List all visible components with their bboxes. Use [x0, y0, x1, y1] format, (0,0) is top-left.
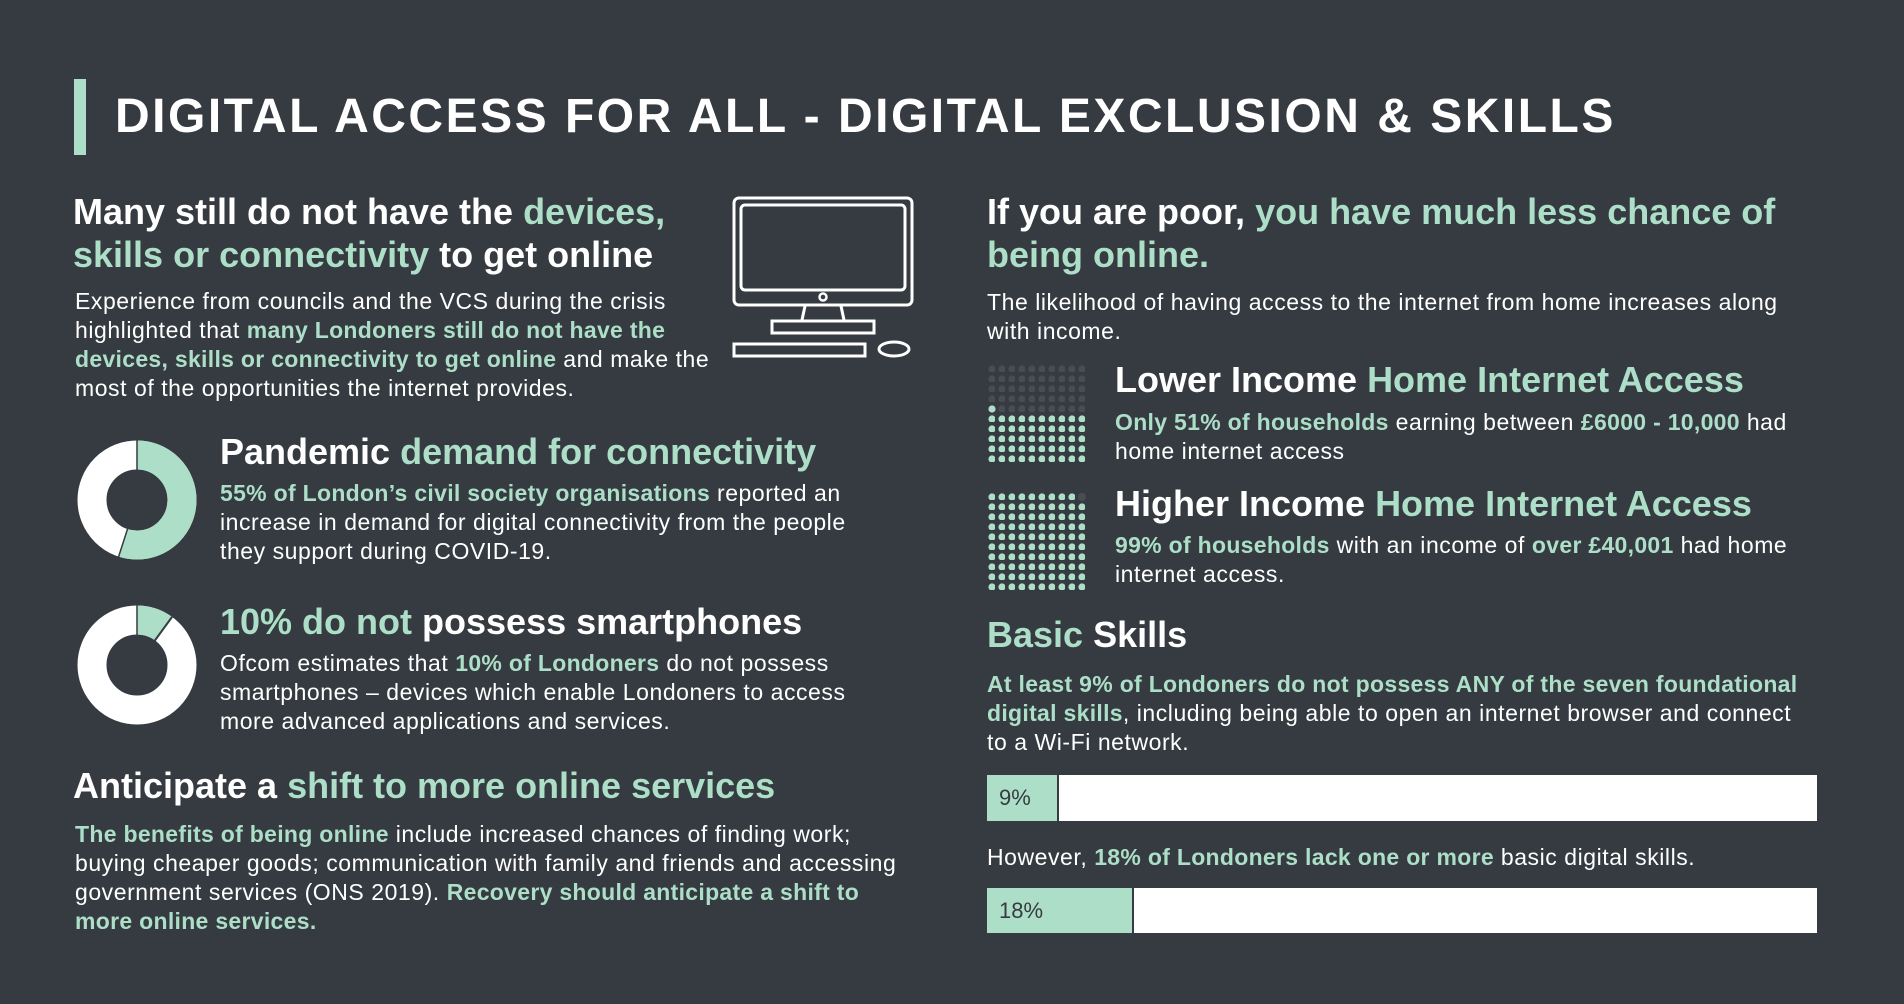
- donut: 10%: [78, 606, 196, 724]
- heading: basic skills: Basic Skills: [987, 614, 1187, 655]
- heading: pandemic: Pandemic demand for connectivity: [220, 431, 816, 472]
- heading: higher income: Higher Income Home Internet Access: [1115, 483, 1752, 524]
- text: 18%: However, 18% of Londoners lack one or more basic digital skills.: [987, 844, 1695, 870]
- text: basic skills: to a Wi-Fi network.: [987, 729, 1189, 755]
- text: higher income: 99% of households with an income of over £40,001 had home: [1115, 532, 1787, 558]
- title: [74, 79, 1616, 155]
- text: basic skills: digital skills, including being able to open an internet browser and connect: [987, 700, 1791, 726]
- text: pandemic: they support during COVID-19.: [220, 538, 552, 564]
- bar: 18%: 18%: [999, 898, 1043, 923]
- text: devices: most of the opportunities the internet provides.: [75, 375, 574, 401]
- text: anticipate: more online services.: [75, 908, 317, 934]
- text: pandemic: 55% of London’s civil society organisations reported an: [220, 480, 841, 506]
- text: smartphones: smartphones – devices which enable Londoners to access: [220, 679, 846, 705]
- text: lower income: home internet access: [1115, 438, 1345, 464]
- icon: computer: [732, 196, 914, 358]
- bar: 9%: 9%: [999, 785, 1031, 810]
- heading: poor: being online.: [987, 234, 1209, 275]
- dots: higher income: [988, 493, 1086, 590]
- dots: lower income: [988, 366, 1085, 462]
- text: devices: highlighted that many Londoners still do not have the: [75, 317, 665, 343]
- text: poor: [987, 289, 1778, 344]
- heading: devices: [73, 191, 665, 275]
- heading: lower income: Lower Income Home Internet Access: [1115, 359, 1744, 400]
- text: pandemic: [220, 480, 846, 564]
- text: lower income: [1115, 409, 1787, 464]
- donut: 55%: [78, 440, 196, 560]
- bar: 9%: [987, 775, 1817, 821]
- heading: devices: Many still do not have the devices,: [73, 191, 665, 232]
- text: anticipate: buying cheaper goods; communication with family and friends and accessing: [75, 850, 896, 876]
- heading: poor: If you are poor, you have much less chance of: [987, 191, 1775, 232]
- heading: smartphones: 10% do not possess smartphones: [220, 601, 802, 642]
- text: devices: devices, skills or connectivity to get online and make the: [75, 346, 709, 372]
- text: lower income: Only 51% of households earning between £6000 - 10,000 had: [1115, 409, 1787, 435]
- bar: 18%: [987, 888, 1817, 933]
- text: basic skills: [987, 671, 1797, 755]
- text: devices: Experience from councils and the VCS during the crisis: [75, 288, 666, 314]
- text: higher income: internet access.: [1115, 561, 1285, 587]
- text: pandemic: increase in demand for digital connectivity from the people: [220, 509, 846, 535]
- text: anticipate: government services (ONS 2019). Recovery should anticipate a shift to: [75, 879, 859, 905]
- text: poor: The likelihood of having access to the internet from home increases along: [987, 289, 1778, 315]
- heading: anticipate: Anticipate a shift to more online services: [73, 765, 775, 806]
- heading: poor: [987, 191, 1776, 275]
- title: DIGITAL ACCESS FOR ALL - DIGITAL EXCLUSION & SKILLS: [115, 90, 1616, 143]
- text: poor: with income.: [987, 318, 1121, 344]
- text: devices: [75, 288, 709, 401]
- text: anticipate: The benefits of being online include increased chances of finding work;: [75, 821, 851, 847]
- heading: devices: skills or connectivity to get online: [73, 234, 653, 275]
- text: smartphones: [220, 650, 846, 734]
- text: anticipate: [75, 821, 896, 934]
- text: basic skills: At least 9% of Londoners do not possess ANY of the seven foundational: [987, 671, 1797, 697]
- text: higher income: [1115, 532, 1787, 587]
- text: smartphones: Ofcom estimates that 10% of Londoners do not possess: [220, 650, 829, 676]
- text: smartphones: more advanced applications and services.: [220, 708, 670, 734]
